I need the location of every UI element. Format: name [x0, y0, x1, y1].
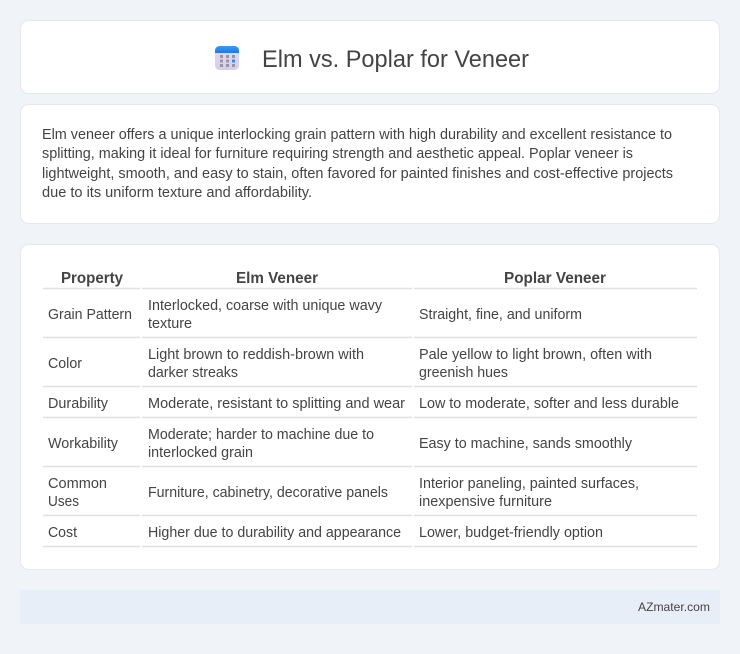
- row: color: Light brown to reddish-brown with: [148, 347, 364, 363]
- row: color: [48, 347, 652, 381]
- row: durability: Low to moderate, softer and less durable: [419, 396, 679, 412]
- row: durability: Moderate, resistant to splitting and wear: [148, 396, 405, 412]
- row: workability: Workability: [48, 436, 119, 452]
- row: grain pattern: Grain Pattern: [48, 307, 132, 323]
- row: workability: Easy to machine, sands smoothly: [419, 436, 633, 452]
- row: color: darker streaks: [148, 365, 238, 381]
- row: common uses: Common: [48, 476, 107, 492]
- row: grain pattern: texture: [148, 316, 192, 332]
- row: common uses: Furniture, cabinetry, decorative panels: [148, 485, 388, 501]
- row: common uses: inexpensive furniture: [419, 494, 552, 510]
- row: color: Color: [48, 356, 82, 372]
- panel: comparison table: [20, 244, 720, 570]
- row: grain pattern: Interlocked, coarse with unique wavy: [148, 298, 383, 314]
- header panel: [20, 20, 720, 94]
- row: workability: Moderate; harder to machine due to: [148, 427, 374, 443]
- row: color: greenish hues: [419, 365, 508, 381]
- panel: introduction: [20, 104, 720, 224]
- icon: calendar: [215, 46, 239, 70]
- row: color: Pale yellow to light brown, often with: [419, 347, 652, 363]
- row: common uses: Uses: [48, 494, 79, 510]
- row: cost: Lower, budget-friendly option: [419, 525, 603, 541]
- title: Elm vs. Poplar for Veneer: [262, 46, 529, 73]
- intro text: due to its uniform texture and affordability.: [42, 185, 312, 201]
- row: workability: interlocked grain: [148, 445, 253, 461]
- table header row: Property: [61, 270, 123, 287]
- footer credit: AZmater.com: [638, 600, 710, 614]
- intro text: splitting, making it ideal for furniture requiring strength and aesthetic appeal. Poplar veneer is: [42, 146, 633, 162]
- row: common uses: [48, 476, 639, 510]
- table header row: Elm Veneer: [236, 270, 318, 287]
- table header row: Poplar Veneer: [504, 270, 606, 287]
- row: cost: Higher due to durability and appearance: [148, 525, 401, 541]
- row: workability: [48, 427, 633, 461]
- table header row: [61, 270, 606, 287]
- row: durability: Durability: [48, 396, 109, 412]
- footer bar: [20, 590, 720, 624]
- row: cost: Cost: [48, 525, 77, 541]
- intro text: Elm veneer offers a unique interlocking grain pattern with high durability and excellent resistance to: [42, 127, 672, 143]
- intro text: lightweight, smooth, and easy to stain, often favored for painted finishes and cost-effective projects: [42, 166, 673, 182]
- row: grain pattern: [48, 298, 582, 332]
- row: grain pattern: Straight, fine, and uniform: [419, 307, 582, 323]
- row: cost: [48, 525, 603, 541]
- row: common uses: Interior paneling, painted surfaces,: [419, 476, 639, 492]
- row: durability: [48, 396, 679, 412]
